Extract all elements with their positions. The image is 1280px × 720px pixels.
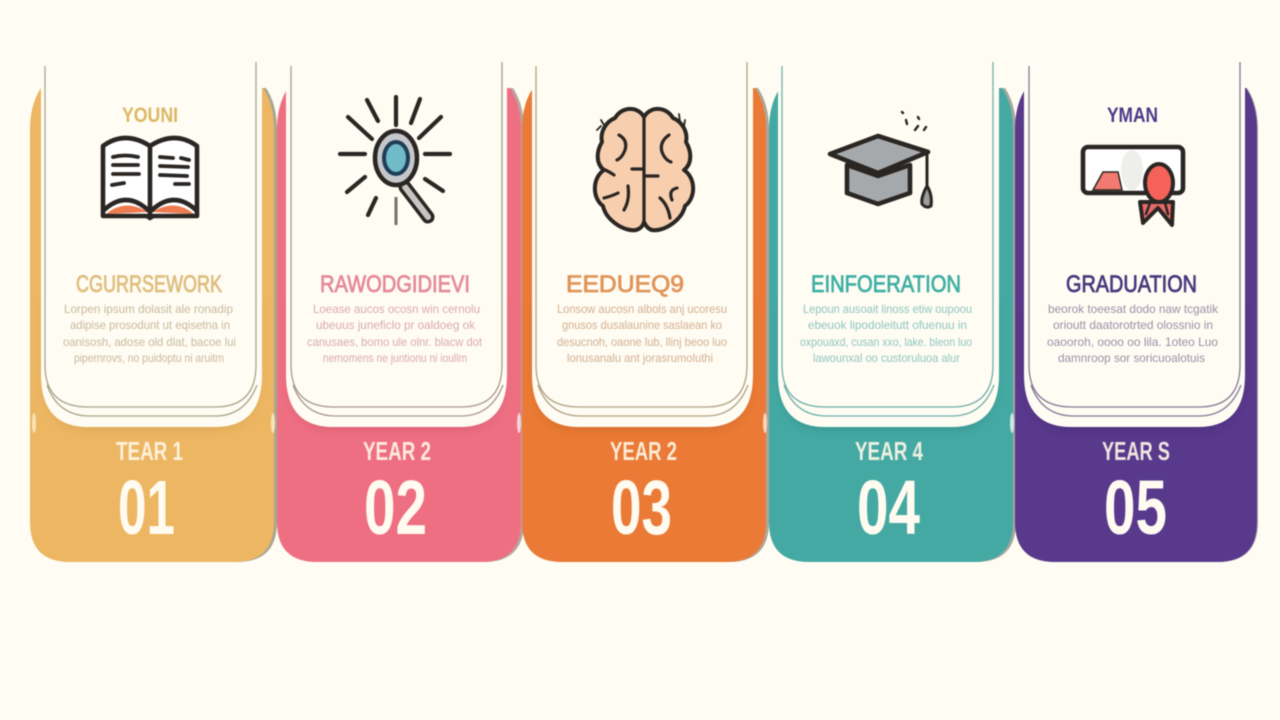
body text: pipernrovs, no puidoptu ni aruitm bbox=[74, 351, 224, 365]
body text: damnroop sor soricuoalotuis bbox=[1058, 351, 1205, 365]
body text: Loease aucos ocosn win cernolu bbox=[313, 302, 480, 316]
step number: 03 bbox=[611, 465, 672, 551]
panel: year 4 integration bbox=[769, 60, 1016, 562]
panel: year 5 graduation bbox=[1015, 60, 1258, 562]
body text: canusaes, bomo ule olnr. blacw dot bbox=[307, 335, 483, 349]
year label: YEAR 4 bbox=[855, 436, 923, 466]
body text: desucnoh, oaone lub, llinj beoo luo bbox=[557, 335, 727, 349]
body text: Lonsow aucosn albols anj ucoresu bbox=[557, 302, 727, 316]
body text: ebeuok lipodoleitutt ofuenuu in bbox=[808, 318, 967, 332]
body text: orioutt daatorotrted olossnio in bbox=[1053, 318, 1213, 332]
step number: 05 bbox=[1104, 465, 1167, 551]
body text: oaooroh, oooo oo lila. 1oteo Luo bbox=[1047, 335, 1218, 349]
body text bbox=[557, 302, 727, 365]
body text: beorok toeesat dodo naw tcgatik bbox=[1048, 302, 1219, 316]
icon: graduation cap bbox=[830, 112, 931, 207]
panel: year 3 research bbox=[522, 60, 769, 562]
title: RAWODGIDIEVI bbox=[320, 271, 470, 298]
icon: open book bbox=[103, 138, 197, 218]
icon: magnifier with rays bbox=[340, 97, 450, 225]
body text: gnusos dusalaunine saslaean ko bbox=[562, 318, 722, 332]
step number: 04 bbox=[857, 465, 920, 551]
icon: brain bbox=[595, 109, 693, 230]
small label: YOUNI bbox=[122, 104, 178, 127]
body text: lonusanalu ant jorasrumoluthi bbox=[567, 351, 713, 365]
title: CGURRSEWORK bbox=[76, 271, 222, 298]
body text: lawounxal oo custoruluoa alur bbox=[813, 351, 960, 365]
body text: nemomens ne juntionu ni ioullm bbox=[323, 351, 467, 365]
year label: TEAR 1 bbox=[116, 436, 183, 466]
small label: YMAN bbox=[1107, 104, 1158, 127]
body text: Lorpen ipsum dolasit ale ronadip bbox=[64, 302, 233, 316]
year label: YEAR S bbox=[1102, 436, 1170, 466]
body text: oanisosh, adose old dlat, bacoe lui bbox=[63, 335, 236, 349]
icon: diploma with rosette bbox=[1083, 147, 1183, 225]
body text: oxpouaxd, cusan xxo, lake. bleon luo bbox=[800, 335, 972, 349]
body text bbox=[63, 302, 236, 365]
body text: adipise prosodunt ut eqisetna in bbox=[70, 318, 230, 332]
title: EEDUEQ9 bbox=[566, 271, 684, 298]
panel: year 1 coursework bbox=[30, 60, 277, 562]
step number: 01 bbox=[118, 465, 175, 551]
body text bbox=[800, 302, 972, 365]
year label: YEAR 2 bbox=[363, 436, 431, 466]
panel: year 2 assessment bbox=[277, 60, 524, 562]
body text: ubeuus juneficlo pr oaldoeg ok bbox=[316, 318, 476, 332]
step number: 02 bbox=[364, 465, 427, 551]
year label: YEAR 2 bbox=[610, 436, 677, 466]
body text bbox=[307, 302, 483, 365]
body text bbox=[1047, 302, 1219, 365]
body text: Lepoun ausoait linoss etiw oupoou bbox=[803, 302, 972, 316]
title: GRADUATION bbox=[1066, 271, 1197, 298]
title: EINFOERATION bbox=[811, 271, 961, 298]
